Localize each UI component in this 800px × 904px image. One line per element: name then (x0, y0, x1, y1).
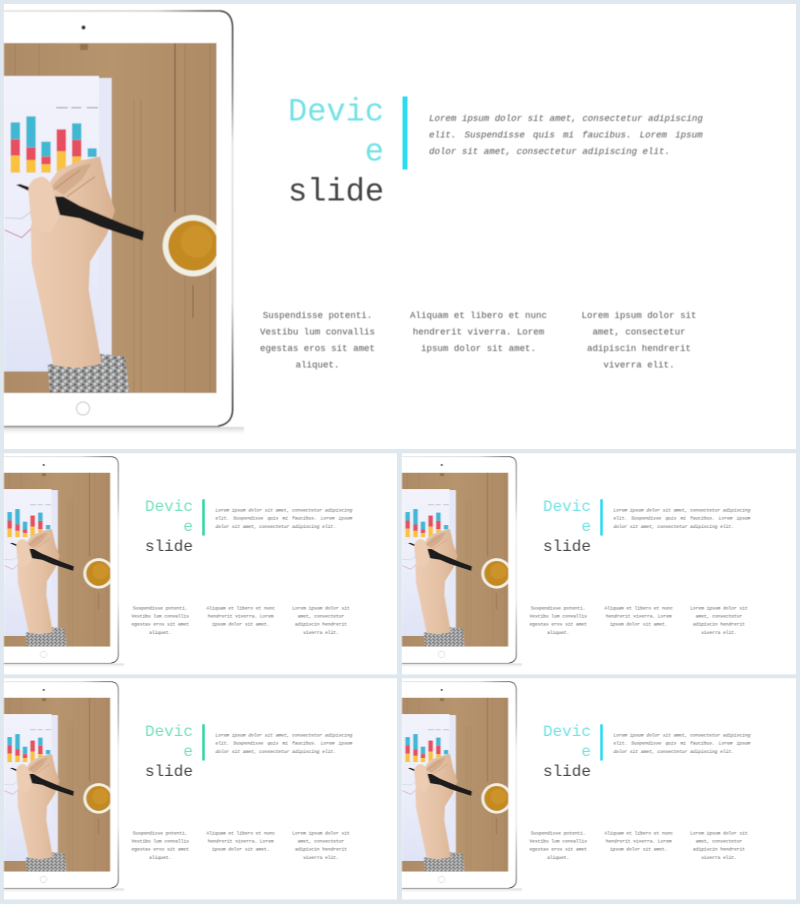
text column 3 (582, 310, 696, 370)
illustration: tablet (380, 682, 522, 893)
text columns (132, 605, 350, 636)
text columns: amet, consectetur (696, 614, 743, 620)
title: slide (145, 763, 193, 781)
text columns: Aliquam et libero et nunc (605, 605, 673, 611)
title: slide (145, 538, 193, 556)
text columns: egestas eros sit amet (132, 622, 189, 628)
text columns: adipiscin hendrerit (693, 847, 745, 853)
text column 2: Aliquam et libero et nunc (410, 310, 547, 321)
text column 3: viverra elit. (603, 360, 675, 370)
panel: small slide top right (380, 453, 796, 674)
text columns: ipsum dolor sit amet. (212, 847, 269, 853)
text columns: adipiscin hendrerit (295, 847, 347, 853)
text columns: adipiscin hendrerit (295, 622, 347, 628)
text columns: Lorem ipsum dolor sit (690, 605, 748, 611)
illustration: tablet (380, 457, 522, 668)
text columns: aliquet. (547, 855, 569, 861)
title: e (365, 134, 384, 170)
title: e (581, 518, 591, 536)
text columns: Aliquam et libero et nunc (605, 830, 673, 836)
text columns: Aliquam et libero et nunc (207, 830, 275, 836)
text columns: Vestibu lum convallis (132, 614, 189, 620)
text columns: hendrerit viverra. Lorem (606, 614, 672, 620)
text columns: adipiscin hendrerit (693, 622, 745, 628)
title: Devic (288, 94, 384, 130)
text columns: egestas eros sit amet (530, 847, 587, 853)
text columns: Lorem ipsum dolor sit (690, 830, 748, 836)
text columns: egestas eros sit amet (132, 847, 189, 853)
text columns: Vestibu lum convallis (530, 614, 587, 620)
intro paragraph: Lorem ipsum dolor sit amet, consectetur adipiscing (215, 507, 353, 513)
intro paragraph: dolor sit amet, consectetur adipiscing elit. (613, 524, 734, 530)
text columns: amet, consectetur (298, 839, 345, 845)
text columns: hendrerit viverra. Lorem (208, 839, 274, 845)
text columns (530, 830, 748, 861)
title (145, 723, 193, 781)
text columns: Suspendisse potenti. (133, 830, 188, 836)
accent bar (202, 499, 205, 536)
title: Devic (145, 498, 193, 516)
intro paragraph: Lorem ipsum dolor sit amet, consectetur adipiscing (429, 113, 703, 124)
text column 1: Vestibu lum convallis (260, 326, 375, 338)
intro paragraph: dolor sit amet, consectetur adipiscing elit. (429, 146, 670, 157)
intro paragraph: elit. Suspendisse quis mi faucibus. Lorem ipsum (613, 516, 751, 522)
title (543, 723, 591, 781)
intro paragraph: dolor sit amet, consectetur adipiscing elit. (613, 749, 734, 755)
title: slide (543, 538, 591, 556)
title: e (183, 743, 193, 761)
text columns: ipsum dolor sit amet. (610, 622, 667, 628)
intro paragraph: elit. Suspendisse quis mi faucibus. Lorem ipsum (429, 130, 703, 140)
panel: large device slide (0, 4, 796, 449)
text column 2: ipsum dolor sit amet. (421, 343, 536, 354)
text columns: Lorem ipsum dolor sit (292, 830, 350, 836)
text columns: Lorem ipsum dolor sit (292, 605, 350, 611)
intro paragraph: Lorem ipsum dolor sit amet, consectetur adipiscing (613, 732, 751, 738)
text columns: Aliquam et libero et nunc (207, 605, 275, 611)
panel: small slide bottom left (0, 678, 397, 899)
text columns: viverra elit. (701, 855, 737, 861)
text columns: Suspendisse potenti. (133, 605, 188, 611)
text column 2 (410, 310, 547, 354)
text columns (132, 830, 350, 861)
text columns: viverra elit. (303, 630, 339, 636)
intro paragraph: elit. Suspendisse quis mi faucibus. Lorem ipsum (613, 741, 751, 747)
text columns: hendrerit viverra. Lorem (208, 614, 274, 620)
title: slide (543, 763, 591, 781)
intro paragraph (614, 732, 751, 755)
intro paragraph (215, 732, 353, 755)
accent bar (202, 724, 205, 761)
text columns (530, 605, 748, 636)
text columns: aliquet. (149, 855, 171, 861)
title: Devic (145, 723, 193, 741)
panel: small slide bottom right (380, 678, 796, 899)
text columns: amet, consectetur (696, 839, 743, 845)
title (145, 498, 193, 556)
text column 1: egestas eros sit amet (260, 343, 375, 354)
intro paragraph: Lorem ipsum dolor sit amet, consectetur adipiscing (215, 732, 353, 738)
intro paragraph (614, 507, 751, 530)
text columns: aliquet. (149, 630, 171, 636)
text columns: viverra elit. (701, 630, 737, 636)
title (543, 498, 591, 556)
title: e (183, 518, 193, 536)
title: e (581, 743, 591, 761)
text columns: Vestibu lum convallis (132, 839, 189, 845)
title: Devic (543, 498, 591, 516)
title: slide (288, 174, 384, 210)
title: Devic (543, 723, 591, 741)
text column 1 (260, 310, 375, 370)
text columns: ipsum dolor sit amet. (212, 622, 269, 628)
text column 1: Suspendisse potenti. (263, 310, 372, 321)
text columns: viverra elit. (303, 855, 339, 861)
intro paragraph: elit. Suspendisse quis mi faucibus. Lorem ipsum (215, 516, 353, 522)
panel: small slide top left (0, 453, 397, 674)
text column 2: hendrerit viverra. Lorem (413, 326, 545, 338)
intro paragraph (429, 113, 703, 157)
text column 3: Lorem ipsum dolor sit (582, 310, 696, 321)
intro paragraph: Lorem ipsum dolor sit amet, consectetur adipiscing (613, 507, 751, 513)
illustration: tablet with photo of hand drawing on chart (0, 11, 244, 436)
text columns: hendrerit viverra. Lorem (606, 839, 672, 845)
title (288, 94, 384, 210)
text columns: amet, consectetur (298, 614, 345, 620)
text columns: egestas eros sit amet (530, 622, 587, 628)
text column 3: amet, consectetur (592, 326, 686, 338)
illustration: tablet (0, 682, 124, 893)
text column 1: aliquet. (296, 360, 339, 370)
text columns: Vestibu lum convallis (530, 839, 587, 845)
intro paragraph (215, 507, 353, 530)
text column 3: adipiscin hendrerit (587, 343, 691, 354)
text columns: Suspendisse potenti. (531, 605, 586, 611)
accent bar (600, 499, 603, 536)
accent bar (402, 96, 408, 170)
accent bar (600, 724, 603, 761)
intro paragraph: dolor sit amet, consectetur adipiscing elit. (215, 749, 336, 755)
text columns: Suspendisse potenti. (531, 830, 586, 836)
intro paragraph: dolor sit amet, consectetur adipiscing elit. (215, 524, 336, 530)
text columns: ipsum dolor sit amet. (610, 847, 667, 853)
text columns: aliquet. (547, 630, 569, 636)
intro paragraph: elit. Suspendisse quis mi faucibus. Lorem ipsum (215, 741, 353, 747)
illustration: tablet (0, 457, 124, 668)
